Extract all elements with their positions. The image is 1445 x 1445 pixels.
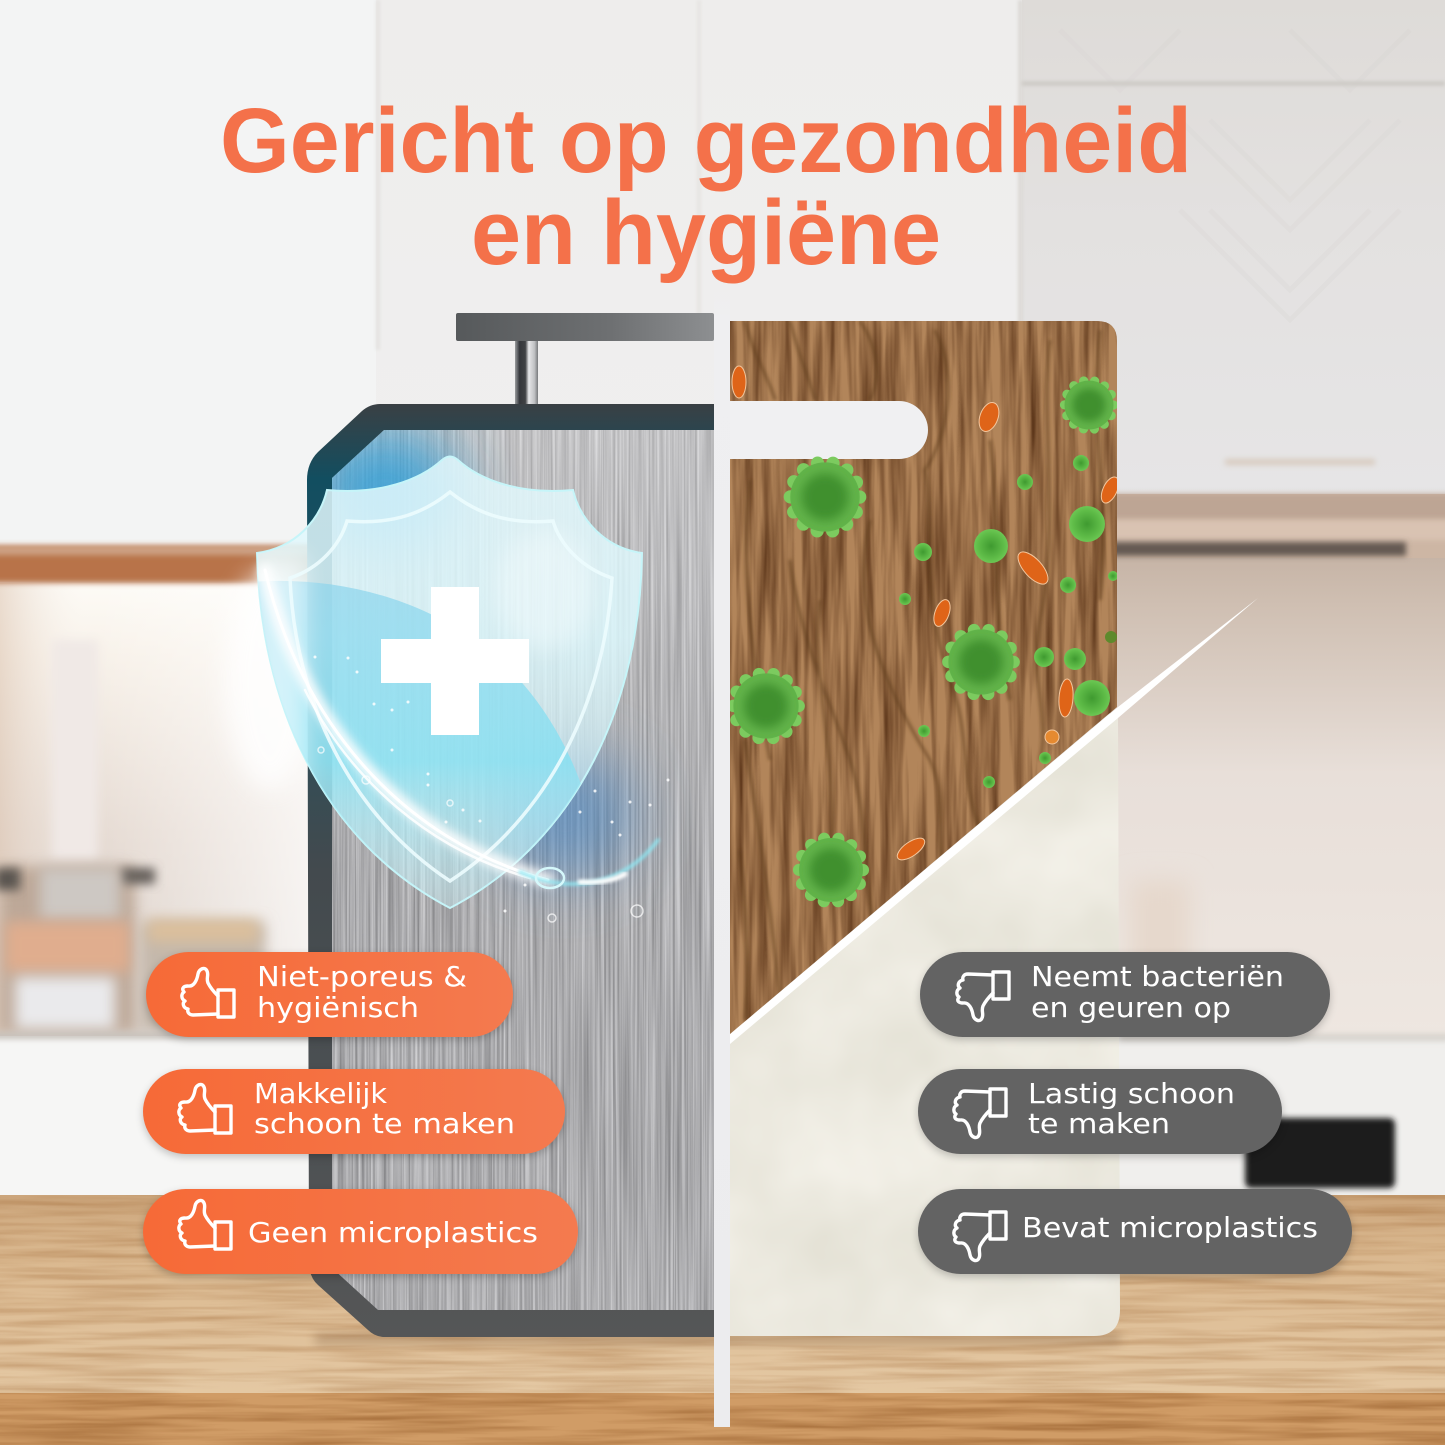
- shield with medical cross: [250, 456, 670, 922]
- icon: thumbs up: [179, 1200, 231, 1249]
- title: Gericht op gezondheid: [220, 90, 1192, 192]
- icon: thumbs up: [179, 1084, 231, 1133]
- handle post: [515, 341, 538, 405]
- light swoosh: [265, 570, 658, 888]
- pill: Lastig schoon te maken: te maken: [1028, 1107, 1170, 1140]
- dark wood grain: [740, 321, 1103, 1020]
- wooden table: [0, 1195, 1445, 1445]
- stainless steel cutting board: [307, 313, 714, 1337]
- blurred pots: [0, 866, 135, 1032]
- wooden cutting board with germs: [730, 321, 1122, 1041]
- icon: thumbs down: [954, 1089, 1006, 1138]
- pill: Lastig schoon te maken: [918, 1069, 1282, 1154]
- glow behind shield: [225, 570, 315, 790]
- handle bar: [456, 313, 714, 341]
- pill: Niet-poreus & hygiënisch: hygiënisch: [257, 991, 419, 1024]
- pill: Geen microplastics: [143, 1189, 578, 1274]
- left shelf: [0, 546, 320, 583]
- pill: Makkelijk schoon te maken: Makkelijk: [254, 1077, 388, 1110]
- icon: thumbs down: [954, 1212, 1006, 1261]
- counter: [0, 1036, 320, 1201]
- pill: Geen microplastics: Geen microplastics: [248, 1216, 538, 1249]
- centre divider strip: [714, 285, 730, 1427]
- large virus particles: [733, 381, 1113, 902]
- pill: Niet-poreus & hygiënisch: Niet-poreus &: [257, 960, 467, 993]
- small green germs: [899, 455, 1118, 788]
- shield body: [257, 456, 642, 908]
- handle hole: [730, 401, 928, 459]
- white cross: [381, 587, 529, 735]
- pill: Makkelijk schoon te maken: schoon te maken: [254, 1107, 515, 1140]
- pill: Niet-poreus & hygiënisch: [146, 952, 513, 1037]
- pill: Neemt bacteriën en geuren op: [920, 952, 1330, 1037]
- pill: Neemt bacteriën en geuren op: en geuren op: [1031, 991, 1231, 1024]
- shield blue inner glow: [250, 530, 600, 910]
- diagonal white peel edge: [730, 598, 1258, 1044]
- board frame: [307, 404, 714, 1337]
- pill: Bevat microplastics: [918, 1189, 1352, 1274]
- sparkle dots: [314, 656, 670, 912]
- shield inner outline: [290, 492, 612, 881]
- pill: Bevat microplastics: Bevat microplastics: [1022, 1211, 1318, 1244]
- pill: Neemt bacteriën en geuren op: Neemt bacteriën: [1031, 960, 1284, 993]
- title: [220, 90, 1192, 284]
- icon: thumbs up: [182, 968, 234, 1017]
- brushed steel surface: [310, 430, 714, 1312]
- white plastic cutting board: [730, 598, 1258, 1340]
- orange bacteria: [732, 366, 1122, 864]
- right lower wall: [1110, 557, 1445, 1037]
- pill: Makkelijk schoon te maken: [143, 1069, 565, 1154]
- title: en hygiëne: [471, 182, 941, 284]
- icon: thumbs down: [957, 972, 1009, 1021]
- pill: Lastig schoon te maken: Lastig schoon: [1028, 1077, 1235, 1110]
- left lower wall: [0, 583, 320, 1038]
